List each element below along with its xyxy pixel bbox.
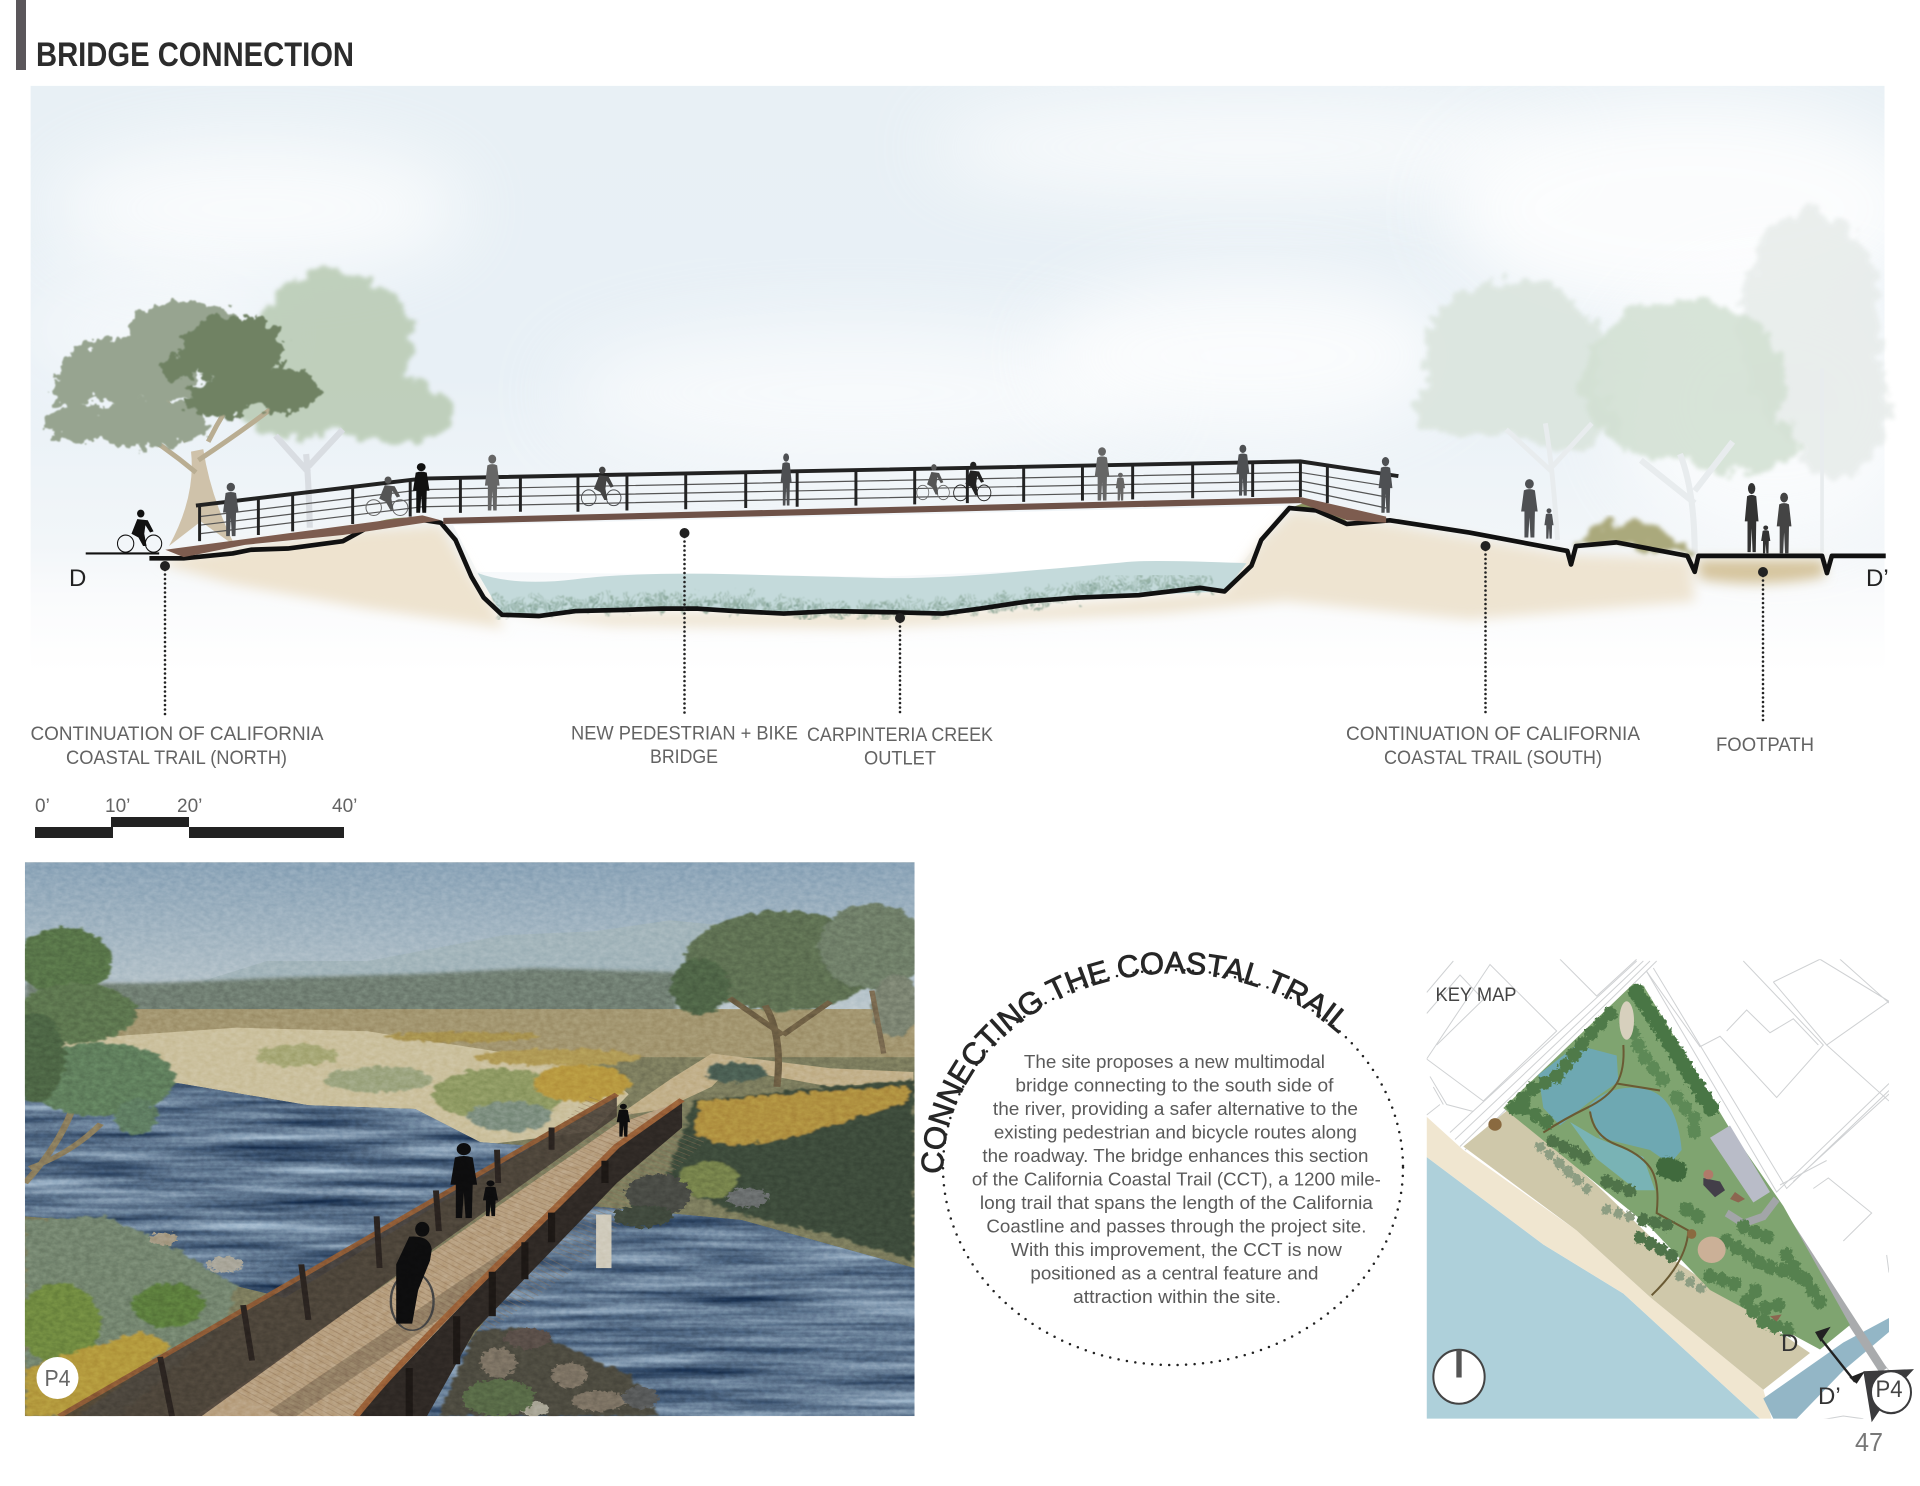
view wedge bbox=[1863, 1369, 1914, 1422]
sea bbox=[1427, 1157, 1760, 1419]
label: south trail: COASTAL TRAIL (SOUTH) bbox=[1384, 747, 1602, 769]
plaza and buildings bbox=[1488, 1001, 1782, 1322]
pier bbox=[596, 1214, 611, 1268]
water bbox=[478, 561, 1247, 615]
label: creek: OUTLET bbox=[864, 748, 936, 770]
body text: positioned as a central feature and bbox=[1030, 1262, 1318, 1284]
label: south trail: CONTINUATION OF CALIFORNIA bbox=[1346, 723, 1640, 745]
title: BRIDGE CONNECTION bbox=[36, 36, 354, 74]
right vegetation bbox=[664, 1062, 915, 1261]
leader: footpath bbox=[1758, 567, 1768, 722]
photo grain bbox=[25, 862, 915, 1416]
tree: left background bbox=[233, 272, 453, 528]
people and cyclists bbox=[117, 445, 1791, 553]
curved heading bbox=[943, 973, 1403, 1174]
scale bar: 10’ bbox=[105, 796, 130, 817]
photo base tone bbox=[25, 862, 915, 1416]
key map P4: P4 bbox=[1876, 1376, 1902, 1403]
ground section line bbox=[86, 508, 1886, 616]
creek bbox=[1763, 1318, 1889, 1419]
label: north trail: COASTAL TRAIL (NORTH) bbox=[66, 747, 287, 769]
leader: south trail bbox=[1480, 541, 1490, 715]
grass clump bbox=[367, 503, 1687, 555]
beach bbox=[1427, 1117, 1772, 1419]
section arrow bbox=[1815, 1327, 1865, 1384]
upper water bbox=[25, 1072, 541, 1301]
view marker circle bbox=[1871, 1371, 1911, 1413]
rock shore bbox=[439, 1327, 658, 1416]
photo sky bbox=[25, 862, 915, 1010]
section mark D prime: D’ bbox=[1866, 565, 1889, 592]
right railing bbox=[356, 1100, 682, 1416]
coastal road bbox=[1777, 1206, 1883, 1370]
dotted ellipse bbox=[943, 970, 1403, 1365]
right trees bbox=[670, 904, 925, 1087]
distant path bbox=[617, 1054, 913, 1116]
entry road bbox=[1727, 1199, 1777, 1224]
scale bar: 20’ bbox=[177, 796, 202, 817]
page number: 47 bbox=[1855, 1427, 1883, 1457]
label: north trail: CONTINUATION OF CALIFORNIA bbox=[30, 723, 324, 745]
photo marker P4 bbox=[36, 1357, 78, 1399]
silhouettes bbox=[391, 1104, 630, 1330]
leader: creek bbox=[895, 613, 905, 716]
scale bar: 0’ bbox=[35, 796, 50, 817]
panel: key map bbox=[1427, 959, 1914, 1422]
body text: of the California Coastal Trail (CCT), a 1200 mile- bbox=[972, 1168, 1381, 1190]
panel: bridge perspective rendering bbox=[6, 862, 925, 1418]
label: bridge: BRIDGE bbox=[650, 746, 718, 768]
label: footpath: FOOTPATH bbox=[1716, 734, 1814, 756]
body text: bridge connecting to the south side of bbox=[1015, 1074, 1334, 1096]
photo marker P4: P4 bbox=[44, 1365, 71, 1391]
tree clusters bbox=[1510, 992, 1823, 1332]
left shrubs bbox=[18, 1216, 237, 1416]
bridge railing bbox=[196, 461, 1398, 541]
body text: Coastline and passes through the project site. bbox=[986, 1216, 1366, 1236]
scale bar bbox=[35, 796, 357, 838]
lower water bbox=[415, 1202, 919, 1418]
mountains bbox=[204, 933, 691, 981]
body text: The site proposes a new multimodal bbox=[1024, 1051, 1325, 1072]
park green bbox=[1503, 984, 1850, 1350]
panel: connecting the coastal trail: CONNECTING THE COASTAL TRAIL bbox=[921, 952, 1344, 1172]
north arrow bbox=[1433, 1350, 1485, 1404]
street lines bbox=[1427, 959, 1889, 1420]
lakes bbox=[1538, 1045, 1682, 1190]
label: bridge: NEW PEDESTRIAN + BIKE bbox=[571, 722, 798, 744]
panel: bridge section drawing bbox=[12, 86, 1920, 770]
panel: connecting the coastal trail bbox=[921, 952, 1404, 1366]
far fields bbox=[25, 1009, 915, 1057]
body text: With this improvement, the CCT is now bbox=[1011, 1239, 1343, 1260]
white space under bridge bbox=[453, 506, 1286, 577]
body text: existing pedestrian and bicycle routes along bbox=[994, 1122, 1357, 1142]
key map label: KEY MAP bbox=[1436, 985, 1516, 1006]
leader: bridge bbox=[680, 528, 690, 716]
section accent bar bbox=[16, 0, 26, 70]
sky background bbox=[12, 86, 1920, 724]
key map D: D bbox=[1781, 1330, 1798, 1357]
parking bbox=[1710, 1126, 1770, 1202]
section mark D: D bbox=[69, 565, 86, 592]
rocks bbox=[148, 1174, 768, 1416]
key map D prime: D’ bbox=[1818, 1383, 1841, 1410]
sand bank bbox=[25, 1028, 629, 1146]
leader: north trail bbox=[160, 561, 170, 716]
grass along creek bbox=[496, 582, 1212, 614]
body text: the river, providing a safer alternative to the bbox=[993, 1098, 1358, 1119]
dune grasses bbox=[255, 1032, 641, 1131]
distant tree line bbox=[24, 966, 679, 1010]
bridge deck bbox=[165, 497, 1386, 557]
left railing bbox=[59, 1094, 617, 1416]
ground fill bbox=[159, 510, 1825, 628]
trails bbox=[1543, 1045, 1688, 1295]
body text: attraction within the site. bbox=[1073, 1286, 1281, 1307]
body text: the roadway. The bridge enhances this section bbox=[982, 1145, 1368, 1166]
tree: left cypress bbox=[47, 302, 321, 546]
left tree bbox=[6, 928, 175, 1183]
trees: right background group bbox=[1413, 209, 1888, 555]
dry meadow bbox=[1463, 1108, 1810, 1390]
scale bar: 40’ bbox=[332, 796, 357, 817]
body text: long trail that spans the length of the California bbox=[980, 1192, 1374, 1213]
deck bbox=[196, 1102, 679, 1416]
label: creek: CARPINTERIA CREEK bbox=[807, 724, 993, 746]
